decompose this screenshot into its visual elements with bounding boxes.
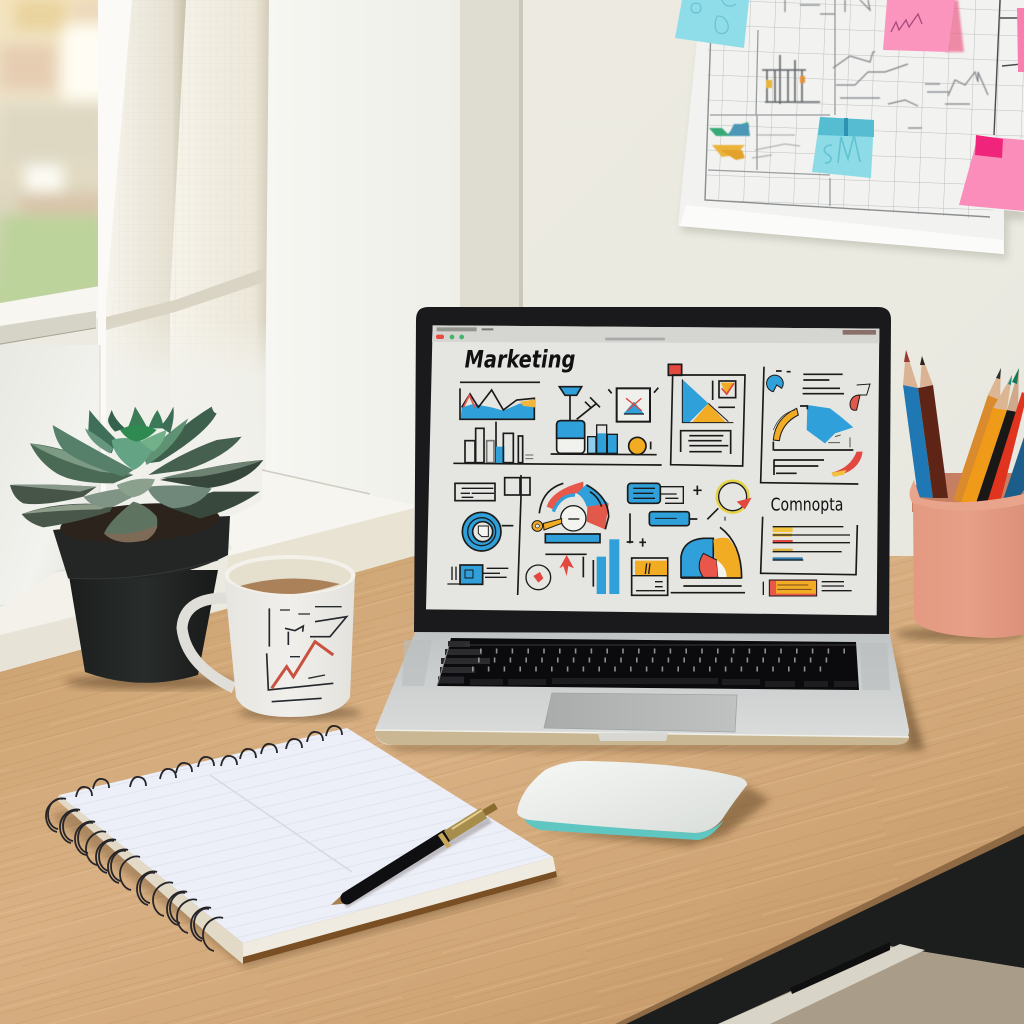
heading: Marketing: Marketing [465, 346, 575, 374]
pen [331, 806, 496, 905]
poster colored marks [709, 122, 800, 160]
panel: central gauge [532, 482, 619, 594]
laptop base [375, 630, 909, 745]
notebook spiral binding [46, 726, 342, 951]
mug rim and coffee [224, 555, 356, 595]
sticky note: cyan top left [675, 0, 749, 48]
panel: pills and magnifier [627, 481, 752, 547]
sheer curtain [0, 0, 269, 615]
panel: triangle document [668, 364, 745, 466]
panel: funnel and gadget chart [551, 387, 658, 455]
panel: dial and blue shape [761, 367, 870, 484]
left coils [46, 798, 223, 951]
wall poster with sketches [675, 0, 1024, 259]
computer mouse [517, 761, 770, 846]
keyboard [437, 638, 859, 690]
laptop screen dashboard [426, 325, 879, 615]
mouse shadow [540, 785, 770, 846]
wooden desk [0, 556, 1024, 1024]
pot shadow [65, 675, 235, 689]
laptop lid and bezel [414, 307, 891, 634]
dark pot [53, 516, 230, 683]
window with outside view [0, 0, 112, 345]
pencil cup with coloured pencils [895, 350, 1024, 641]
soil [59, 498, 221, 548]
succulent leaves [10, 407, 263, 542]
panel: Comnopta list [761, 495, 857, 596]
mug body [224, 575, 355, 717]
panel: Comnopta list: Comnopta [771, 495, 843, 516]
laptop shadow [380, 640, 925, 750]
cup shadow [895, 627, 1024, 641]
trackpad [544, 693, 737, 732]
poster bar sketch [762, 55, 820, 104]
spiral notebook [46, 726, 562, 968]
screen background [426, 325, 879, 615]
poster line sketches [785, 0, 988, 128]
window frame [0, 286, 100, 332]
coral cup [910, 480, 1024, 638]
sticky note: pink right [959, 135, 1024, 211]
top coils [76, 726, 342, 797]
panel: left lower card and circle icon [447, 475, 551, 595]
coffee mug with chart [182, 555, 362, 720]
panel: area and bar charts [453, 382, 662, 465]
sticky note: pink top right edge [1017, 8, 1024, 72]
mug chart [267, 607, 347, 702]
window sill [0, 470, 414, 672]
laptop [375, 307, 925, 750]
sticky note: cyan middle [812, 117, 874, 178]
mouse base [524, 818, 724, 840]
sticky note: pink top [883, 0, 964, 52]
notebook shadow [50, 740, 562, 968]
cup back wall [912, 473, 1024, 512]
mug shadow [238, 706, 362, 720]
browser toolbar [432, 325, 879, 343]
dark space beneath desk [626, 834, 1024, 1024]
mouse shell [517, 761, 747, 833]
notebook pages [57, 728, 557, 964]
pencils [903, 350, 1024, 503]
panel: lower orange card and semi gauge [632, 527, 745, 595]
window recess wall [262, 0, 523, 560]
mug handle [182, 598, 234, 688]
succulent plant in dark pot [10, 407, 263, 689]
